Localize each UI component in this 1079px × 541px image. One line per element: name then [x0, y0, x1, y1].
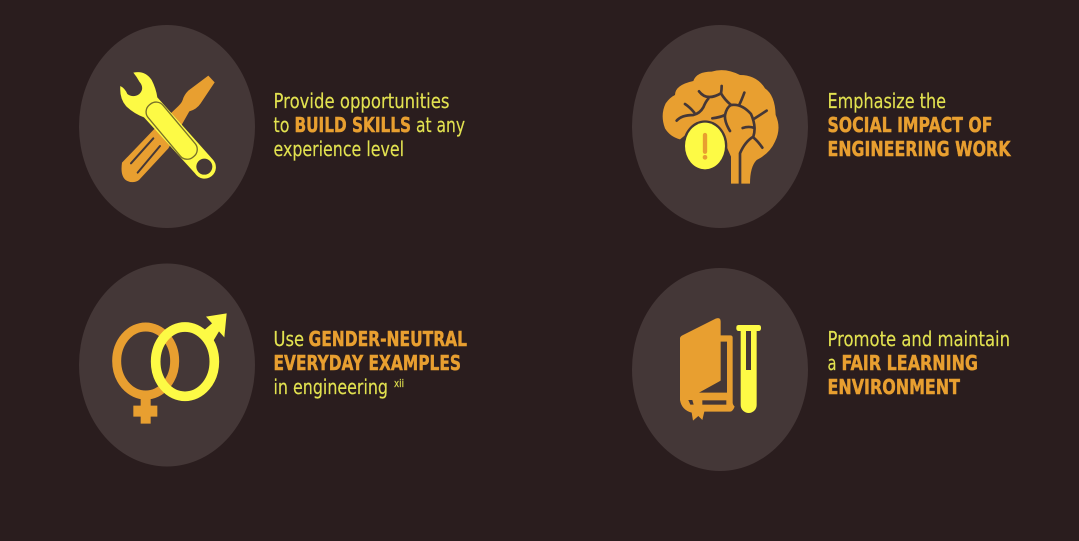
- icon: brain with exclamation mark: [663, 70, 779, 184]
- panel: social impact: [632, 25, 1012, 228]
- icon circle: brain: [632, 25, 808, 228]
- text: social impact: ENGINEERING WORK: [828, 137, 1012, 161]
- text: build skills: [274, 89, 465, 161]
- icon circle: tools: [79, 25, 255, 228]
- text: fair learning environment: FAIR LEARNING: [842, 351, 978, 375]
- text: gender-neutral examples: EVERYDAY EXAMPLES: [274, 351, 461, 375]
- panel: fair learning environment: [632, 268, 1010, 471]
- text: gender-neutral examples: GENDER-NEUTRAL: [308, 327, 467, 351]
- text: fair learning environment: ENVIRONMENT: [828, 375, 960, 399]
- text: social impact: [828, 89, 1012, 161]
- text: build skills: BUILD SKILLS: [294, 113, 411, 137]
- panel: build skills: [79, 25, 465, 228]
- text: build skills: at any: [416, 113, 465, 137]
- text: fair learning environment: [828, 327, 1010, 399]
- icon circle: gender symbols: [79, 264, 255, 466]
- icon: gender symbols: [117, 313, 227, 424]
- text: gender-neutral examples: xii: [394, 377, 404, 390]
- text: social impact: Emphasize the: [828, 89, 946, 113]
- text: build skills: Provide opportunities: [274, 89, 450, 113]
- panel: gender-neutral examples: [79, 264, 467, 466]
- text: fair learning environment: Promote and maintain: [828, 327, 1010, 351]
- text: build skills: experience level: [274, 137, 404, 161]
- text: gender-neutral examples: Use: [274, 327, 304, 351]
- icon: wrench and screwdriver: [120, 72, 216, 182]
- icon circle: book and test tube: [632, 268, 808, 471]
- icon: book and test tube: [680, 318, 761, 421]
- text: build skills: to: [274, 113, 290, 137]
- text: social impact: SOCIAL IMPACT OF: [828, 113, 992, 137]
- text: fair learning environment: a: [828, 351, 836, 375]
- text: gender-neutral examples: in engineering: [274, 375, 388, 399]
- text: gender-neutral examples: [274, 327, 467, 399]
